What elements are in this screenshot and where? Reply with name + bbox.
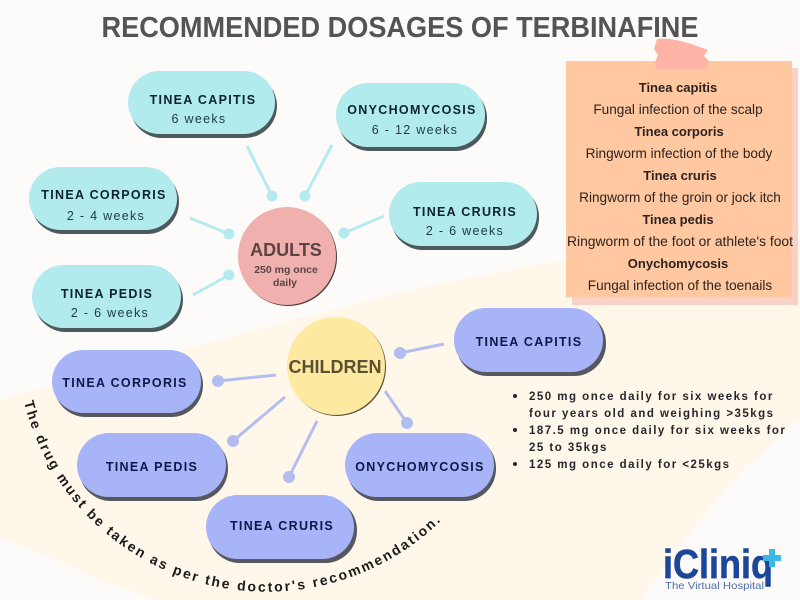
- pill: adults tinea capitis: [128, 71, 277, 138]
- circle: adults: [238, 207, 337, 306]
- pill: children tinea cruris: [206, 495, 357, 563]
- definitions text: Tinea corporis: [634, 124, 724, 139]
- pill: children onychomycosis: ONYCHOMYCOSIS: [355, 460, 485, 474]
- children dosage list: [513, 391, 786, 471]
- pill: adults tinea corporis: [29, 167, 179, 234]
- pill: children tinea corporis: [52, 350, 203, 417]
- children dosage list: 25 to 35kgs: [529, 442, 608, 454]
- pill: adults tinea capitis: TINEA CAPITIS: [150, 93, 256, 107]
- children dosage list: 250 mg once daily for six weeks for: [529, 391, 774, 403]
- circle: adults: 250 mg once: [254, 264, 318, 276]
- circle: adults: ADULTS: [250, 240, 322, 260]
- children dosage list: 125 mg once daily for <25kgs: [529, 459, 731, 471]
- connectors: children: [212, 344, 444, 483]
- pill: adults tinea cruris: [389, 182, 539, 250]
- pill: children tinea capitis: TINEA CAPITIS: [476, 335, 582, 349]
- pill: children tinea corporis: TINEA CORPORIS: [62, 376, 188, 390]
- definitions text: Fungal infection of the toenails: [588, 278, 772, 293]
- panel: definitions note: [566, 39, 798, 305]
- pill: adults tinea corporis: 2 - 4 weeks: [67, 209, 145, 223]
- pill: adults onychomycosis: [336, 83, 487, 151]
- definitions text: Tinea cruris: [643, 168, 717, 183]
- definitions text: Onychomycosis: [628, 256, 728, 271]
- definitions text: Ringworm of the foot or athlete's foot: [567, 234, 793, 249]
- connectors: adults: [190, 145, 384, 295]
- pill: adults tinea cruris: 2 - 6 weeks: [426, 224, 504, 238]
- pill: adults onychomycosis: 6 - 12 weeks: [372, 123, 458, 137]
- logo: iCliniq: iCliniq: [663, 541, 773, 587]
- pill: adults tinea pedis: TINEA PEDIS: [61, 287, 153, 301]
- definitions text: Tinea pedis: [642, 212, 714, 227]
- title: RECOMMENDED DOSAGES OF TERBINAFINE: [102, 12, 698, 44]
- pill: adults tinea pedis: [32, 265, 183, 332]
- children dosage list: 187.5 mg once daily for six weeks for: [529, 425, 786, 437]
- children dosage list: four years old and weighing >35kgs: [529, 408, 775, 420]
- circle: children: CHILDREN: [288, 357, 382, 377]
- pill: adults tinea cruris: TINEA CRURIS: [413, 205, 517, 219]
- definitions text: [567, 80, 793, 293]
- pill: children tinea pedis: TINEA PEDIS: [106, 460, 198, 474]
- definitions text: Ringworm of the groin or jock itch: [579, 190, 781, 205]
- circle: children: [287, 317, 386, 416]
- definitions text: Fungal infection of the scalp: [593, 102, 763, 117]
- logo: iCliniq: The Virtual Hospital: [665, 580, 764, 592]
- curved advisory text: The drug must be taken as per the doctor's recommendation.: [24, 400, 440, 592]
- pill: adults tinea corporis: TINEA CORPORIS: [41, 188, 167, 202]
- icon: plus: [763, 549, 781, 567]
- definitions text: Tinea capitis: [639, 80, 717, 95]
- pill: adults tinea capitis: 6 weeks: [172, 112, 226, 126]
- pill: children tinea cruris: TINEA CRURIS: [230, 519, 334, 533]
- pill: children onychomycosis: [345, 433, 496, 501]
- definitions text: Ringworm infection of the body: [586, 146, 773, 161]
- pill: children tinea pedis: [77, 433, 228, 501]
- pill: adults onychomycosis: ONYCHOMYCOSIS: [347, 103, 477, 117]
- pill: adults tinea pedis: 2 - 6 weeks: [71, 306, 149, 320]
- circle: adults: daily: [273, 277, 297, 289]
- pill: children tinea capitis: [454, 308, 606, 376]
- icon: note tape: [654, 39, 709, 69]
